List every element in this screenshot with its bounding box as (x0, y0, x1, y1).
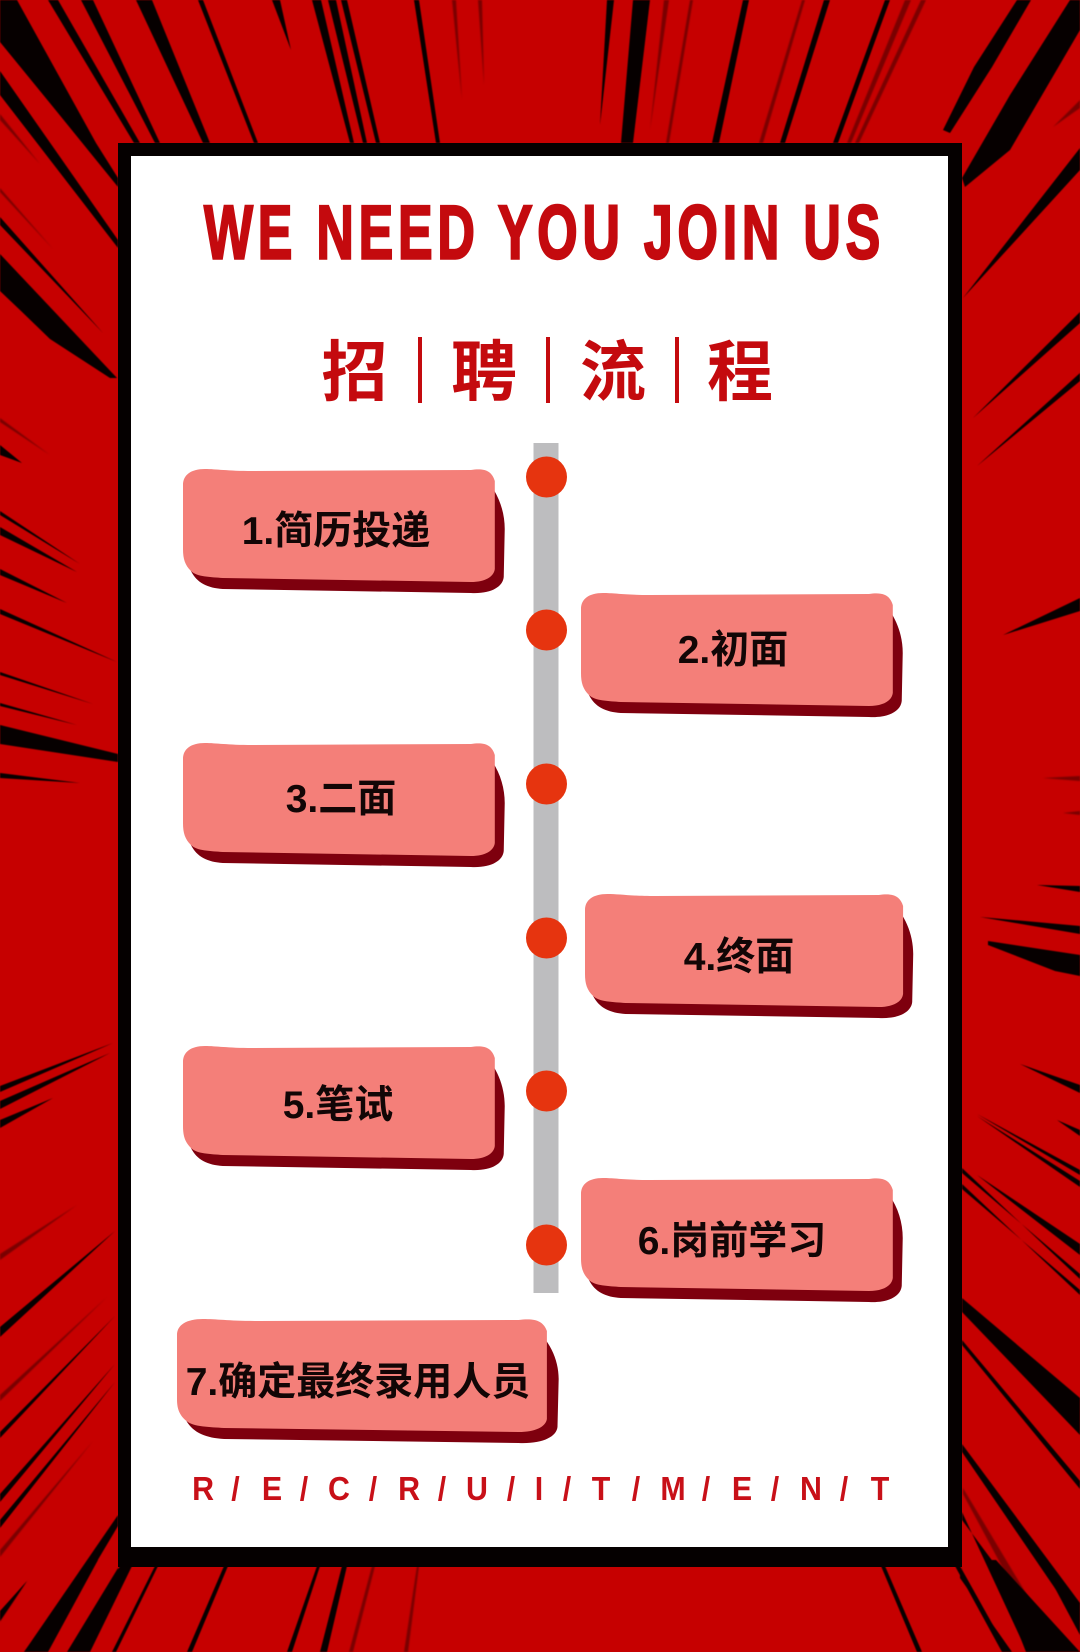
footer: RECRUITMENT: R/E/C/R/U/I/T/M/E/N/T (192, 1470, 890, 1507)
step 6 card (581, 1178, 903, 1302)
step 1 card: 1.简历投递 (242, 510, 430, 553)
step 5 card (183, 1046, 505, 1170)
timeline bar with dots (526, 443, 567, 1293)
step 2 card (581, 593, 903, 717)
step 2 card: 2.初面 (678, 629, 788, 672)
step 5 card: 5.笔试 (283, 1084, 393, 1127)
step 4 card: 4.终面 (684, 936, 794, 979)
step 7 card: 7.确定最终录用人员 (186, 1361, 530, 1404)
step 1 card (183, 469, 505, 593)
step 3 card: 3.二面 (286, 778, 396, 821)
panel: black frame with white sheet (118, 143, 962, 1567)
step 3 card (183, 743, 505, 867)
heading: 招聘流程: 招聘流程 (322, 335, 773, 409)
step 7 card (177, 1319, 559, 1443)
step 6 card: 6.岗前学习 (638, 1220, 826, 1263)
step 4 card (585, 894, 913, 1018)
